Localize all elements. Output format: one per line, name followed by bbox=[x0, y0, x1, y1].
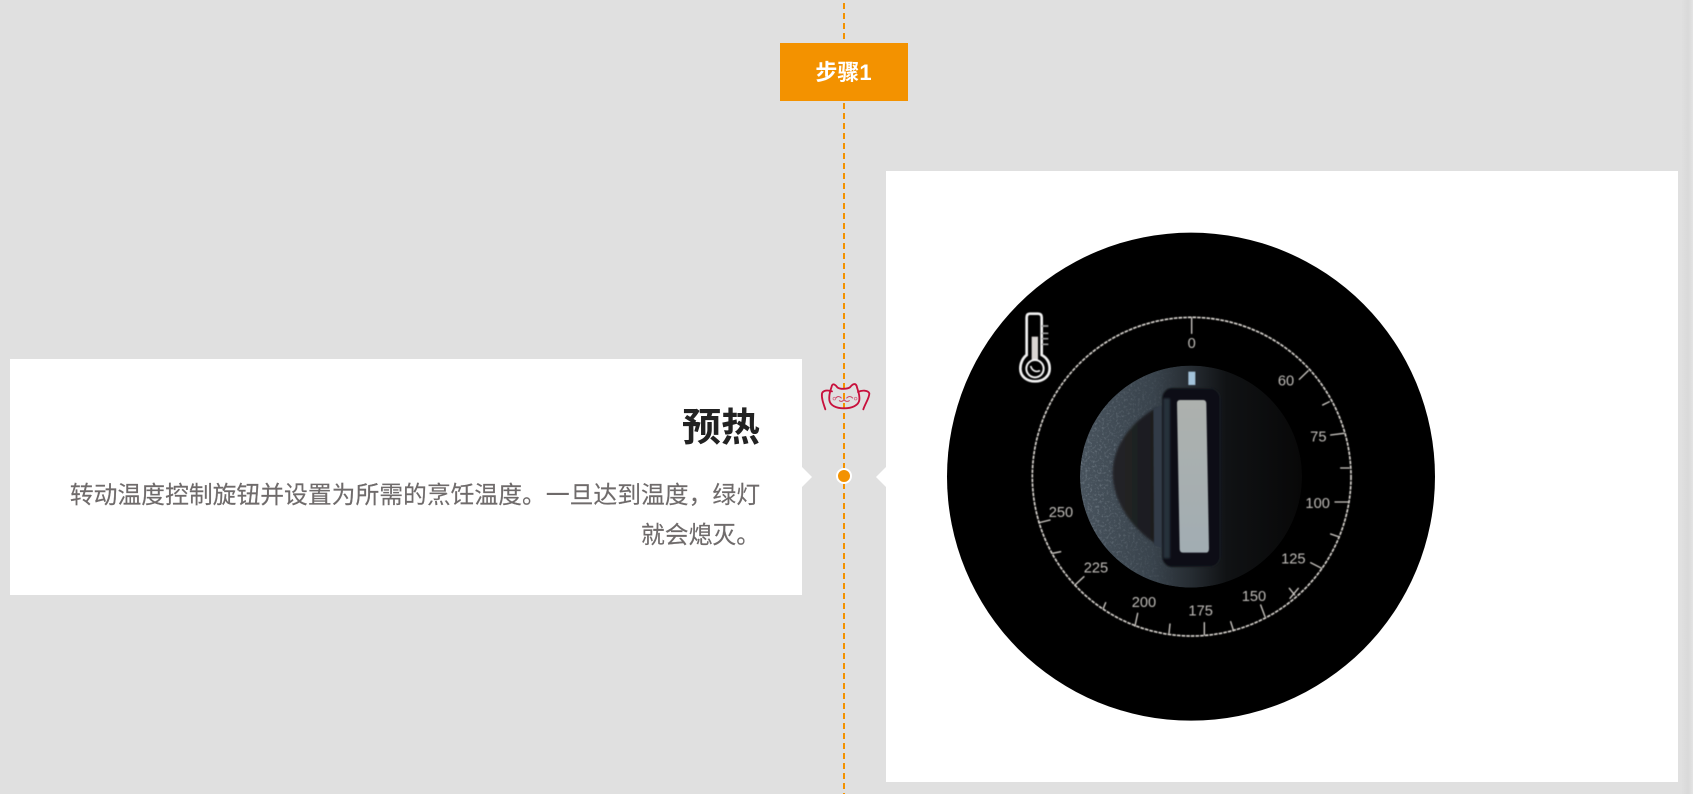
dial outer disc bbox=[947, 233, 1435, 721]
scale numbers bbox=[1049, 336, 1330, 619]
rotary knob bbox=[1073, 360, 1302, 593]
timeline dot bbox=[837, 469, 851, 483]
handle side highlight bbox=[1163, 398, 1170, 558]
icon: cat logo bbox=[822, 384, 869, 409]
dashed timeline bbox=[843, 0, 845, 794]
panel: description bbox=[10, 359, 802, 595]
scale numbers: 250 bbox=[1049, 505, 1073, 521]
scale numbers: 175 bbox=[1188, 603, 1213, 619]
text block: description bbox=[70, 482, 760, 548]
notch: left panel pointer bbox=[802, 467, 812, 487]
scale numbers: 100 bbox=[1305, 496, 1330, 512]
text block: description: 转动温度控制旋钮并设置为所需的烹饪温度。一旦达到温度，绿灯 bbox=[70, 482, 760, 508]
indicator mark bbox=[1188, 372, 1195, 385]
scale numbers: 150 bbox=[1242, 589, 1266, 605]
timeline graphics bbox=[802, 3, 1435, 794]
notch: right panel pointer bbox=[876, 467, 886, 487]
scale numbers: 75 bbox=[1310, 429, 1326, 445]
panel: image bbox=[886, 171, 1678, 782]
scale numbers: 125 bbox=[1281, 552, 1306, 568]
scale ring bbox=[1032, 317, 1351, 636]
step badge background bbox=[780, 43, 908, 101]
scale numbers: 200 bbox=[1132, 595, 1156, 611]
knob inner dark face bbox=[1111, 408, 1154, 544]
handle white strip bbox=[1177, 400, 1209, 553]
heading: preheat: 预热 bbox=[682, 407, 760, 450]
scale ticks bbox=[1039, 318, 1349, 635]
step badge: 步骤1 bbox=[815, 60, 872, 85]
knob speckle texture bbox=[1080, 376, 1160, 577]
scale numbers: 60 bbox=[1278, 373, 1294, 389]
scale numbers: 225 bbox=[1084, 561, 1108, 577]
handle surround bbox=[1163, 388, 1220, 567]
dial image bbox=[947, 233, 1435, 721]
knob body bbox=[1080, 366, 1302, 588]
grip ridge bbox=[1153, 405, 1163, 548]
text block: description: 就会熄灭。 bbox=[641, 522, 760, 548]
icon: thermometer bbox=[1020, 314, 1050, 381]
scale numbers: 0 bbox=[1188, 336, 1196, 352]
scrollbar edge strip bbox=[1681, 0, 1693, 794]
